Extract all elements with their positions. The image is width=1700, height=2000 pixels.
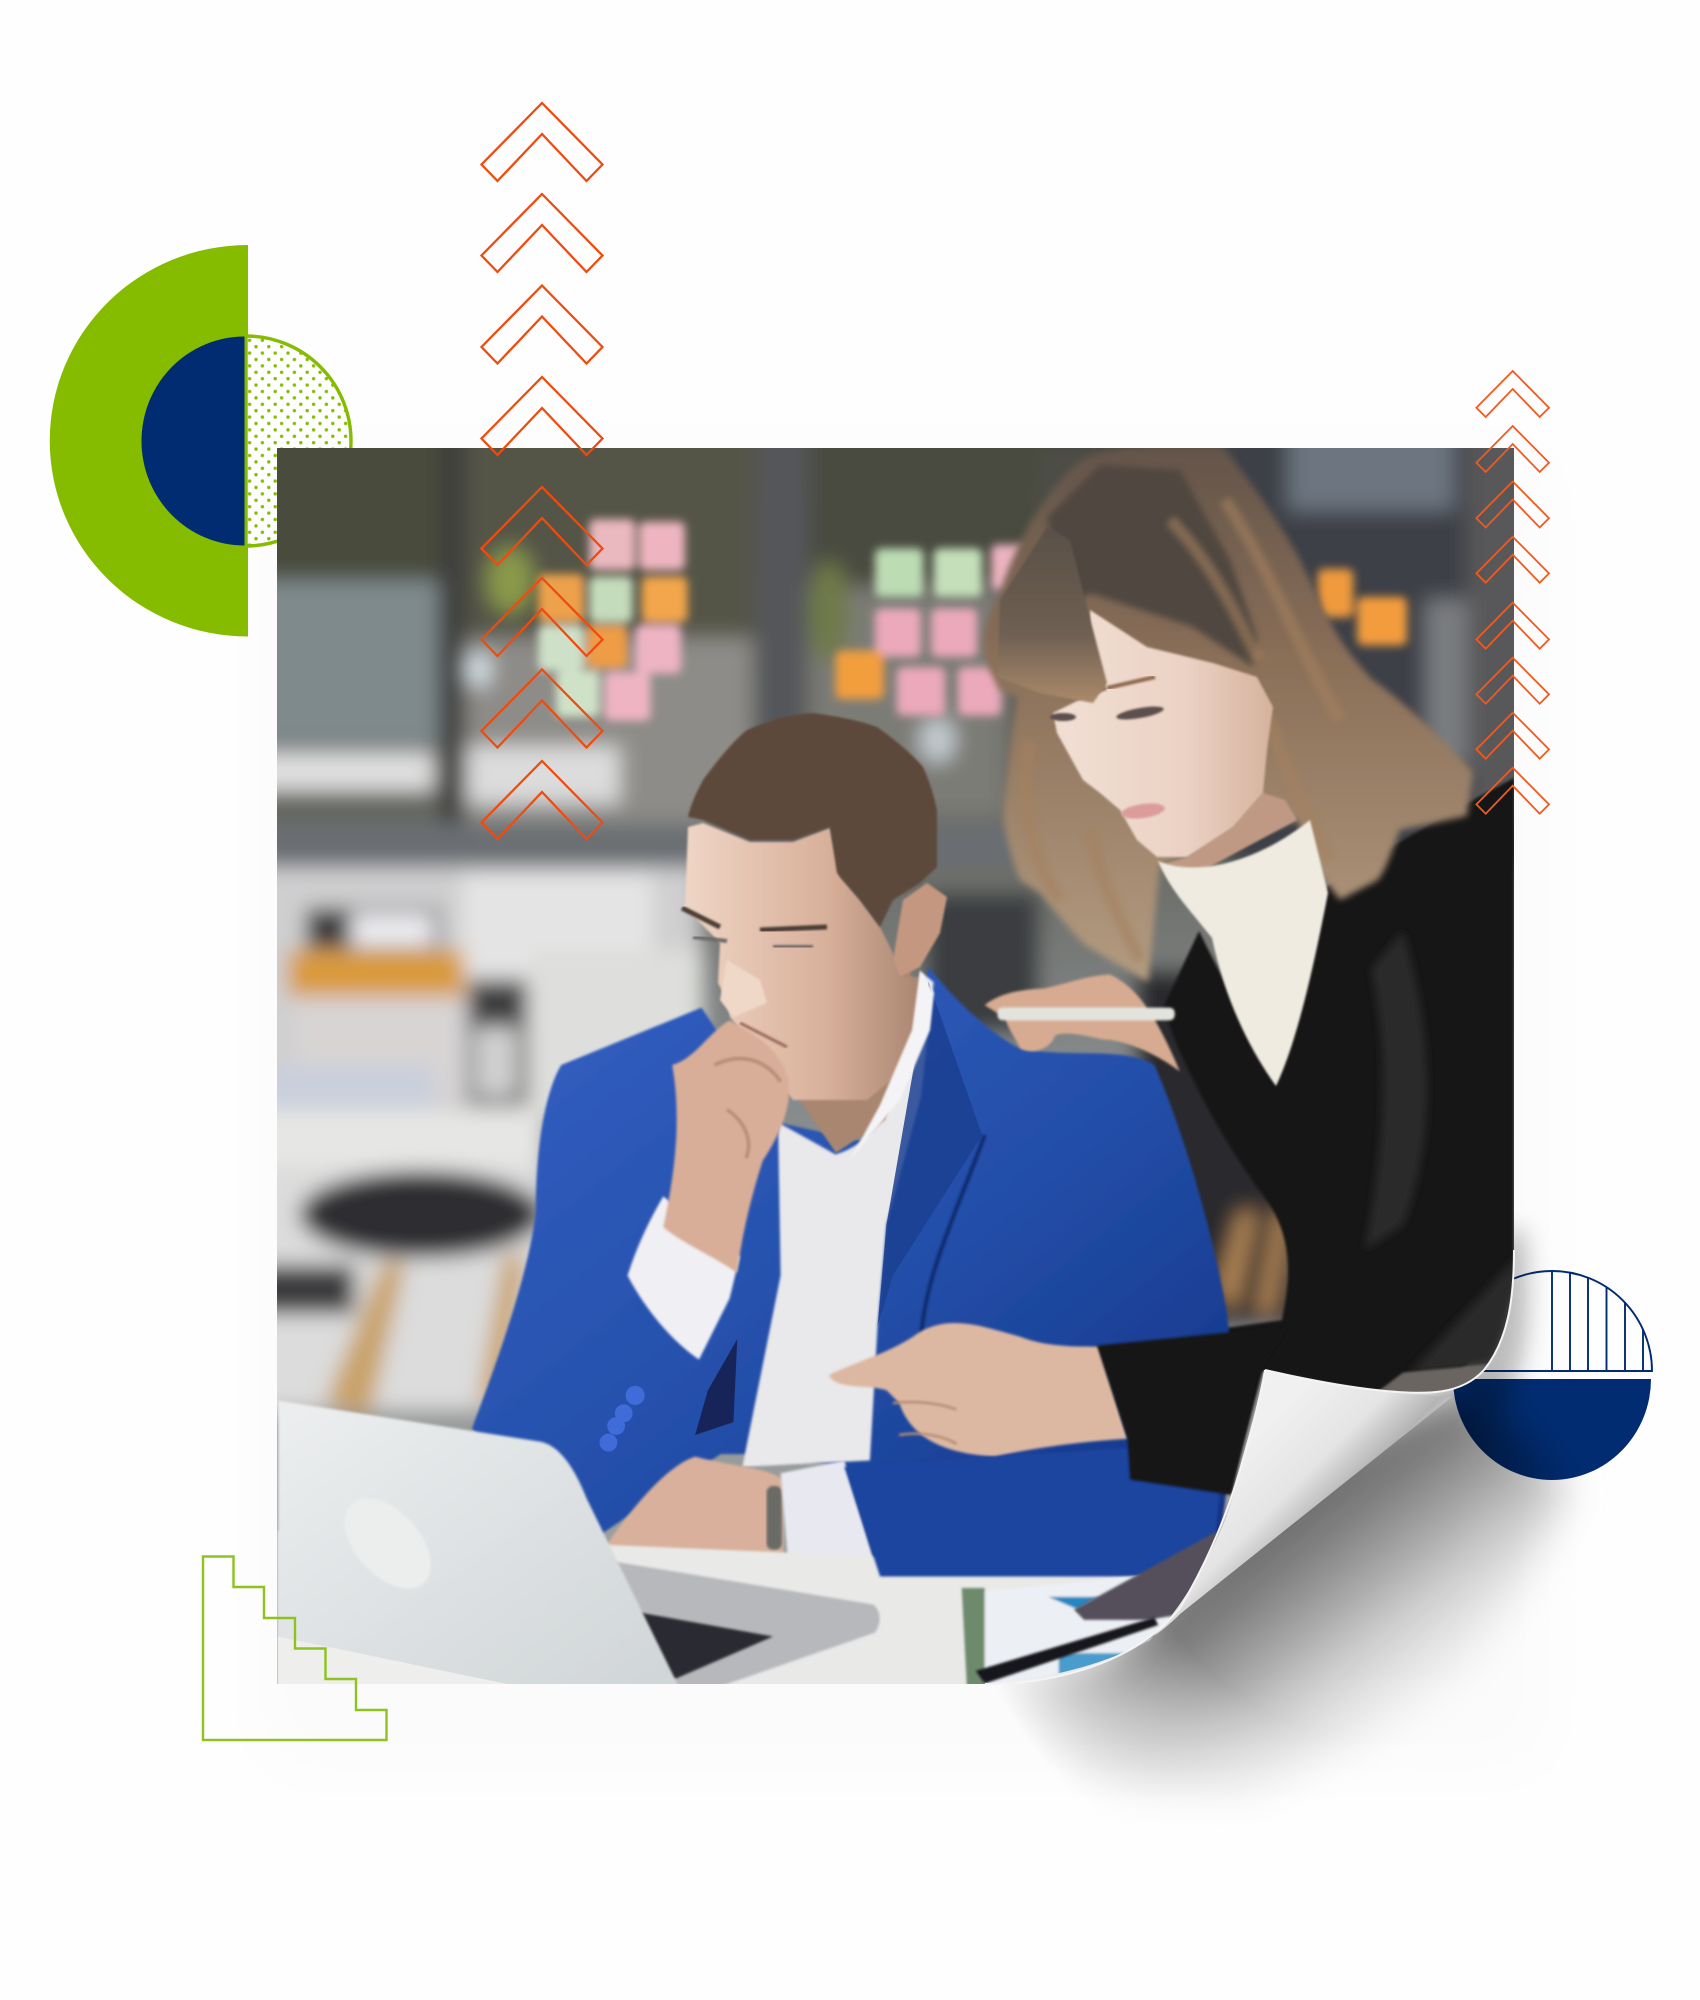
woman neck [1160, 793, 1297, 872]
small chevron 2 [1476, 426, 1549, 472]
curl cast shadow [930, 1230, 1570, 1800]
woman face [1053, 610, 1273, 857]
icon: green staircase outline [203, 1556, 386, 1740]
small chevron 4 [1476, 537, 1549, 583]
small chevron 8 [1476, 768, 1549, 814]
man ear [893, 883, 947, 977]
man mouth [740, 1023, 787, 1047]
woman pointing hand [829, 1323, 1128, 1457]
dotted half circle [246, 336, 351, 546]
small chevron 7 [1476, 713, 1549, 759]
phone [1074, 1531, 1224, 1620]
sleeve buttons [599, 1386, 645, 1452]
laptop lid [278, 1400, 679, 1686]
man sleeve over desk [844, 1441, 1224, 1577]
small chevron 3 [1476, 482, 1549, 528]
woman hair [983, 446, 1473, 982]
jacket seam [921, 1135, 985, 1339]
laptop base [612, 1561, 880, 1686]
page soft shadow [260, 450, 1550, 1770]
man hair [688, 713, 937, 927]
chevron 4 [482, 377, 602, 455]
woman hand and pen [985, 974, 1180, 1071]
woman bangs [997, 527, 1107, 703]
finger folds [893, 1402, 957, 1444]
woman turtleneck [1158, 820, 1328, 1086]
hands and lower scene [278, 974, 1518, 1696]
man body [472, 967, 1232, 1577]
man jacket [472, 967, 1232, 1577]
fold white edge [985, 1250, 1514, 1684]
chevron 7 [482, 670, 602, 748]
chevron 3 [482, 286, 602, 364]
desk corner below lid [278, 1636, 518, 1686]
small chevron 5 [1476, 603, 1549, 649]
chevron 5 [482, 487, 602, 565]
hand finger lines [714, 1059, 781, 1158]
paper with chart [962, 1575, 1212, 1696]
laptop keyboard [638, 1612, 773, 1679]
man brows [682, 908, 827, 930]
pen on desk [976, 1617, 1158, 1684]
hair crown shadow [1047, 465, 1257, 667]
laptop logo [328, 1482, 447, 1605]
woman jacket [1163, 777, 1514, 1494]
back of lower-right photo edge [1408, 1256, 1518, 1375]
man forearm on desk [606, 1457, 783, 1558]
desk [278, 1531, 1224, 1696]
man shirt [742, 972, 934, 1467]
jacket highlight [1365, 931, 1427, 1250]
man arm shadow [695, 1339, 737, 1435]
chevron 8 [482, 761, 602, 839]
plaid patch [1376, 1365, 1487, 1398]
chevron 6 [482, 578, 602, 656]
woman cuff over sleeve [1097, 1327, 1288, 1495]
man face [685, 823, 923, 1100]
shirt collar [850, 970, 934, 1160]
small chevron 6 [1476, 658, 1549, 704]
man neck [793, 960, 925, 1153]
office background [277, 448, 1514, 1684]
orange chevrons: small column [1476, 371, 1549, 814]
green half ring [50, 245, 248, 636]
man right cuff [781, 1460, 875, 1566]
photo: two colleagues at a laptop [277, 448, 1514, 1684]
woman eyes [1050, 704, 1165, 722]
icon: navy half circle with vertical stripes [1452, 1271, 1652, 1480]
small chevron 1 [1476, 371, 1549, 417]
lapel shadow [878, 982, 982, 1327]
woman lips [1120, 802, 1166, 820]
man watch tattoo [767, 1486, 782, 1550]
man head [682, 713, 947, 1160]
fold surface [985, 1370, 1452, 1684]
man cuff left [628, 1196, 740, 1360]
solid lower half [1453, 1379, 1651, 1480]
navy half circle [142, 336, 244, 546]
sticky notes [538, 519, 1407, 721]
icon: concentric half circles [50, 245, 351, 636]
page curl fold [985, 1250, 1514, 1684]
woman brow [1107, 677, 1155, 688]
man eyes [693, 937, 813, 947]
man nose [720, 960, 767, 1017]
striped upper half [1452, 1271, 1652, 1371]
hair streaks [1026, 500, 1340, 960]
woman head [983, 446, 1473, 1086]
right edge shadow [1460, 1230, 1528, 1420]
chevron 1 [482, 103, 602, 181]
office background and sticky notes [277, 448, 1514, 1684]
main wedge shadow [930, 1385, 1570, 1800]
orange chevrons: large column [482, 103, 602, 839]
chevron 2 [482, 194, 602, 272]
man hand at chin [663, 1020, 789, 1273]
